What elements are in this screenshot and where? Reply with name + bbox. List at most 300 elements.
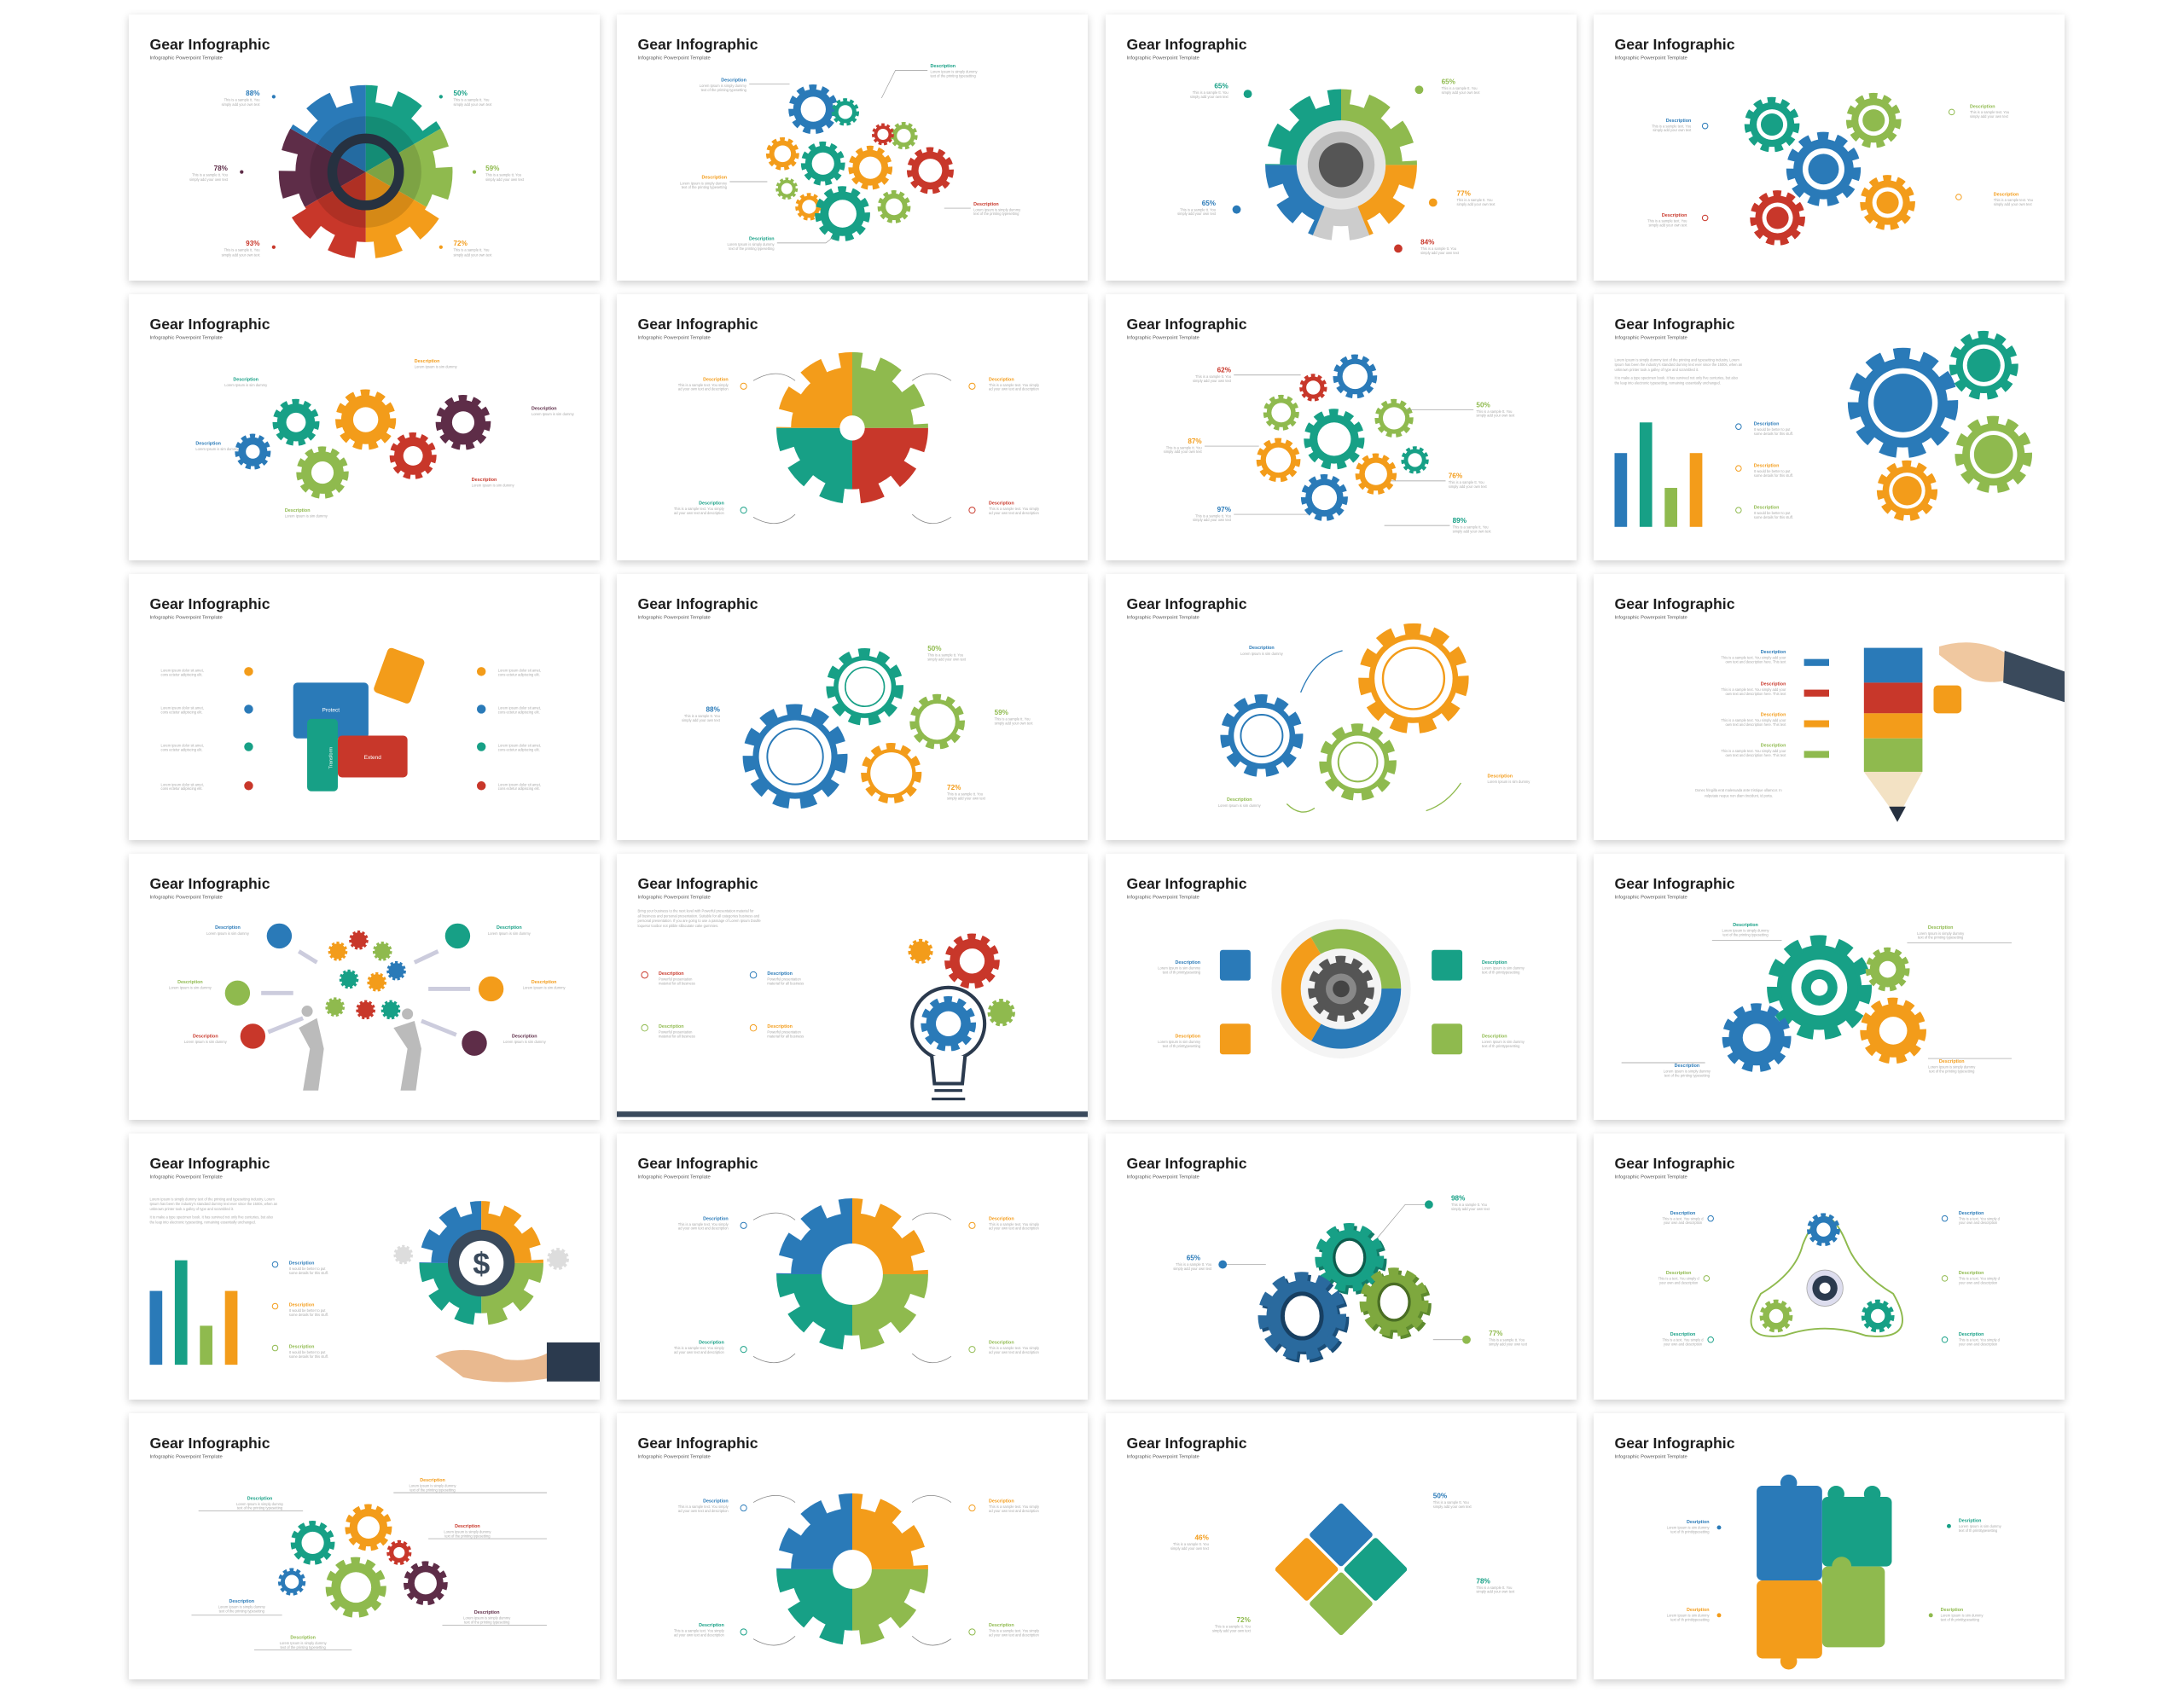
slide 8: bars and gears: Gear Infographic [1614, 316, 1735, 333]
labels: This is a sample tt. You [1433, 1500, 1469, 1505]
labels: text of th printitypesetting [1941, 1617, 1979, 1621]
descriptions: own text and description here. This text [1725, 722, 1786, 727]
labels: This is a sample tt. You [684, 714, 720, 718]
slide 11: three outline gears [1106, 574, 1577, 840]
labels: Desription [1687, 1608, 1710, 1613]
lists: cons ectetur adipiscing elit. [498, 786, 540, 791]
labels: 65% [1442, 78, 1456, 86]
labels: Description [195, 441, 221, 446]
slide 1: segmented gear: Infographic Powerpoint Template [149, 55, 223, 61]
labels: simply add your own text [1970, 114, 2009, 119]
labels [1658, 1211, 2000, 1346]
labels: 88% [246, 90, 260, 97]
descriptions [642, 971, 804, 1039]
slide 21: gear cluster with lines: Gear Infographic [149, 1435, 270, 1452]
gear [776, 1493, 928, 1644]
labels: Description [989, 1623, 1014, 1628]
labels: simply add your own text [1433, 1505, 1472, 1509]
labels: text of the printing typesetting [444, 1534, 490, 1538]
labels: 62% [1217, 366, 1232, 374]
labels: Lorem Ipsum is sim dummy [1218, 803, 1262, 808]
labels: This is a sample tt. You [1420, 246, 1456, 251]
gears [1263, 1227, 1426, 1357]
labels: Description [1666, 1271, 1691, 1276]
labels: simply add your own text [1190, 95, 1229, 99]
paragraph: It to make a type specimen book. It has survived not only five centuries, but also [1614, 376, 1739, 380]
labels: Lorem Ipsum is sim dummy [224, 383, 268, 387]
paragraph: unknown printer took a galley of type and scrambled it. [1614, 368, 1699, 372]
descriptions: Powerful presentation [659, 977, 692, 982]
descriptions: It would be better to put [289, 1267, 326, 1271]
labels: Lorem Ipsum is simply dummy [280, 1641, 328, 1645]
gears [1855, 335, 2027, 517]
slide 10: outline gears [617, 574, 1088, 840]
labels: Description [1959, 1332, 1984, 1337]
lists: Lorem ipsum dolor sit amet, [161, 744, 204, 748]
labels: ad your own text and description [989, 387, 1039, 391]
labels: Lorem Ipsum is sim dummy [1482, 1040, 1525, 1044]
labels: Description [1994, 192, 2018, 197]
labels [1218, 646, 1531, 808]
slide 11: three outline gears: Infographic Powerpoint Template [1126, 615, 1199, 620]
slide 8: bars and gears [1594, 294, 2065, 560]
descriptions: Description [1761, 682, 1786, 687]
labels: This is a sample tt. You [1476, 409, 1512, 414]
labels: Description [1662, 213, 1687, 218]
labels: 65% [1202, 200, 1217, 207]
labels: Description [455, 1524, 480, 1529]
labels: Description [1666, 119, 1691, 124]
labels [680, 64, 1021, 251]
descriptions: It would be better to put [289, 1308, 326, 1313]
gears [1226, 630, 1461, 796]
descriptions [1736, 422, 1793, 519]
bar chart [1614, 422, 1702, 527]
slide 9: puzzle [129, 574, 600, 840]
slide 1: segmented gear: Gear Infographic [149, 36, 270, 53]
labels: simply add your own text [1476, 1590, 1515, 1594]
labels: Description [1227, 797, 1252, 803]
labels: 65% [1214, 83, 1228, 90]
descriptions: Description [659, 971, 684, 977]
paragraph: It to make a type specimen book. It has survived not only five centuries, but also [149, 1215, 274, 1220]
labels: This is a sample tt. You [454, 97, 489, 101]
circles and labels: Description [193, 1035, 218, 1040]
slide 20: spinner gears: Gear Infographic [1614, 1155, 1735, 1172]
descriptions [1695, 650, 1829, 797]
paragraph: the leap into electronic typesetting, remaining essentially unchanged. [1614, 380, 1721, 385]
labels: This is a text. You simply d [1959, 1277, 2000, 1281]
labels: simply add your own text [1173, 1267, 1212, 1271]
descriptions: Description [1761, 713, 1786, 718]
dollar gear: $ [473, 1246, 490, 1281]
circles and labels: Lorem Ipsum is sim dummy [169, 985, 212, 989]
descriptions: some details for this stuff. [289, 1354, 328, 1359]
descriptions: Description [289, 1345, 314, 1350]
circles and labels: Lorem Ipsum is sim dummy [488, 931, 531, 936]
labels: Description [721, 78, 746, 83]
labels: simply add your own text [1177, 212, 1217, 216]
slide 15: ring gear with squares: Gear Infographic [1126, 875, 1247, 892]
slide 12: pencil puzzle: Gear Infographic [1614, 595, 1735, 612]
labels: This is a text. You simply d [1959, 1216, 2000, 1220]
slide 2: gear cluster [617, 14, 1088, 281]
slide 3: globe gear: Gear Infographic [1126, 36, 1247, 53]
labels: Description [285, 508, 310, 513]
spinner [1751, 1215, 1902, 1336]
labels: This is a sample text. You simply [678, 1222, 729, 1226]
labels: 93% [246, 240, 260, 247]
labels: ad your own text and description [678, 1509, 729, 1513]
labels: This is a sample text. You simply [989, 1222, 1040, 1226]
labels: simply add your own text [1420, 251, 1460, 255]
slide 22: solid quartered gear [617, 1413, 1088, 1679]
labels: This is a sample tt. You [1176, 1262, 1211, 1267]
labels: text of the printing typesetting [1929, 1069, 1974, 1073]
slide 18: ring gear four colors: Gear Infographic [637, 1155, 758, 1172]
labels: This is a sample tt. You [947, 792, 983, 797]
labels: Lorem Ipsum is sim dummy [1240, 652, 1284, 656]
descriptions: own text and description here. This text [1725, 692, 1786, 696]
slide 23: diamond puzzle: Gear Infographic [1126, 1435, 1247, 1452]
lists: cons ectetur adipiscing elit. [161, 747, 203, 751]
labels: Lorem Ipsum is sim dummy [531, 412, 575, 416]
labels: 50% [454, 90, 468, 97]
labels: simply add your own text [1193, 518, 1232, 522]
labels: This is a sample tt. You [1451, 1203, 1487, 1207]
labels: This is a sample tt. You [995, 717, 1031, 722]
labels: simply add your own text [222, 252, 260, 257]
labels: This is a sample text. You simply [674, 507, 725, 511]
labels: ad your own text and description [989, 1350, 1039, 1354]
labels: This is a sample tt. You [224, 248, 260, 252]
slide 21: gear cluster with lines [129, 1413, 600, 1679]
descriptions: It would be better to put [1754, 511, 1791, 515]
labels: simply add your own text [1170, 1546, 1210, 1551]
lists: Lorem ipsum dolor sit amet, [161, 782, 204, 786]
slide 23: diamond puzzle [1106, 1413, 1577, 1679]
labels: text of the printing typesetting [1918, 936, 1963, 940]
slide 5: scattered gears [129, 294, 600, 560]
labels: This is a sample text. You simply [989, 1505, 1040, 1509]
paragraph: Ipsum has been the industry's standard dummy text ever since the 1500s, when an [1614, 362, 1742, 367]
labels: ad your own text and description [674, 511, 724, 515]
lists: Lorem ipsum dolor sit amet, [498, 744, 541, 748]
labels: Lorem Ipsum is simply dummy [1928, 1065, 1976, 1070]
slide 18: ring gear four colors: Infographic Powerpoint Template [637, 1174, 711, 1180]
labels: This is a sample tt. You [1453, 525, 1489, 529]
labels: This is a sample text. You simply [989, 1628, 1040, 1632]
labels: This is a sample tt. You [1195, 374, 1231, 379]
labels: This is a sample text. You [1652, 124, 1691, 128]
slide 14: bulb gears: Gear Infographic [637, 875, 758, 892]
gear cluster [299, 931, 421, 1091]
labels: This is a sample tt. You [1195, 513, 1231, 518]
labels: Description [1175, 960, 1200, 965]
labels [674, 374, 1040, 524]
labels: simply add your own text [222, 102, 260, 107]
slide 21: gear cluster with lines: Infographic Powerpoint Template [149, 1454, 223, 1459]
slide 7: percent gear cluster [1106, 294, 1577, 560]
labels: Lorem Ipsum is sim dummy [1158, 966, 1201, 971]
labels: simply add your own text [189, 177, 229, 182]
labels: your own and description [1659, 1280, 1698, 1284]
labels: 89% [1453, 517, 1467, 525]
descriptions: This is a sample text. You simply add your [1721, 718, 1786, 722]
labels: 97% [1217, 506, 1232, 513]
slide 22: solid quartered gear: Infographic Powerpoint Template [637, 1454, 711, 1459]
labels: Description [989, 377, 1014, 382]
labels: Description [1928, 925, 1953, 931]
labels: Description [420, 1478, 445, 1483]
paragraph: Ipsum has been the industry's standard dummy text ever since the 1500s, when an [149, 1202, 277, 1206]
labels: 77% [1457, 189, 1472, 197]
circles and labels: Lorem Ipsum is sim dummy [503, 1040, 547, 1044]
labels: This is a sample tt. You [1215, 1625, 1251, 1629]
descriptions: own text and description here. This text [1725, 660, 1786, 664]
labels: 72% [454, 240, 468, 247]
arrows [1287, 651, 1461, 812]
labels: Lorem Ipsum is sim dummy [285, 513, 328, 518]
pencil [1864, 648, 1961, 822]
descriptions: material for all business [767, 982, 804, 986]
labels: Lorem Ipsum is sim dummy [1667, 1613, 1711, 1617]
labels: simply add your own text [1442, 90, 1480, 95]
labels: This is a sample tt. You [1193, 90, 1228, 95]
labels: Description [415, 359, 439, 364]
slide 17: dollar gear with bars: Infographic Powerpoint Template [149, 1174, 223, 1180]
descriptions: Description [1761, 650, 1786, 655]
lists: Lorem ipsum dolor sit amet, [161, 705, 204, 710]
slide 4: five gears: Infographic Powerpoint Template [1614, 55, 1687, 61]
slide 6: four-piece gear: Infographic Powerpoint Template [637, 335, 711, 340]
paragraph [1614, 357, 1742, 385]
lists [161, 667, 541, 791]
labels: ad your own text and description [989, 1632, 1039, 1637]
slide 24: four-piece puzzle [1594, 1413, 2065, 1679]
slide 4: five gears [1594, 14, 2065, 281]
labels: simply add your own text [1193, 379, 1232, 383]
labels: ad your own text and description [674, 1350, 724, 1354]
puzzle pieces: Transform [328, 746, 334, 769]
labels: text of the printing typesetting [729, 246, 775, 251]
labels: simply add your own text [1489, 1342, 1528, 1346]
slide 13: people and gears [129, 854, 600, 1120]
labels: Description [1670, 1211, 1695, 1216]
labels: simply add your own text [1449, 484, 1487, 489]
slide 4: five gears: Gear Infographic [1614, 36, 1735, 53]
labels [195, 359, 575, 518]
gears [1748, 96, 1912, 242]
labels: This is a sample tt. You [1457, 198, 1492, 202]
labels: simply add your own text [485, 177, 525, 182]
labels: Lorem Ipsum is simply dummy [680, 181, 728, 185]
descriptions: This is a sample text. You simply add your [1721, 656, 1786, 660]
labels: This is a sample tt. You [1476, 1586, 1512, 1590]
labels: text of the printing typesetting [1664, 1073, 1710, 1077]
labels: text of the printing typesetting [682, 185, 727, 189]
lists: cons ectetur adipiscing elit. [161, 672, 203, 676]
slide 9: puzzle: Gear Infographic [149, 595, 270, 612]
labels [674, 1495, 1040, 1645]
labels: Desription [1959, 1518, 1981, 1523]
ring [1271, 919, 1411, 1058]
lists: cons ectetur adipiscing elit. [498, 672, 540, 676]
slide 5: scattered gears: Infographic Powerpoint Template [149, 335, 223, 340]
labels: text of the printing typesetting [410, 1487, 456, 1492]
descriptions: some details for this stuff. [1754, 515, 1793, 519]
labels: This is a text. You simply d [1658, 1277, 1699, 1281]
labels [1164, 366, 1515, 533]
labels: Description [1959, 1271, 1984, 1276]
labels: Description [699, 1341, 724, 1346]
labels: This is a text. You simply d [1662, 1216, 1704, 1220]
lists: Lorem ipsum dolor sit amet, [498, 705, 541, 710]
labels: Lorem Ipsum is simply dummy [930, 70, 978, 74]
labels: ad your own text and description [674, 1632, 724, 1637]
slide 12: pencil puzzle [1594, 574, 2065, 840]
labels: simply add your own text [947, 797, 986, 801]
labels: 50% [927, 645, 942, 652]
labels: Description [1675, 1064, 1699, 1069]
labels: Description [1482, 1035, 1507, 1040]
labels: Description [1970, 104, 1995, 109]
labels: text of th printitypesetting [1959, 1528, 1997, 1533]
labels: Lorem Ipsum is simply dummy [1917, 931, 1965, 936]
labels: This is a sample text. You simply [678, 1505, 729, 1509]
labels: Description [474, 1610, 500, 1615]
labels: Lorem Ipsum is simply dummy [1664, 1069, 1711, 1073]
labels: simply add your own text [454, 102, 492, 107]
circles and labels: Description [497, 925, 522, 931]
descriptions: Description [289, 1303, 314, 1308]
labels: This is a sample text. You [1647, 218, 1687, 223]
descriptions: It would be better to put [1754, 469, 1791, 473]
paragraph [149, 1197, 277, 1224]
labels: text of the printing typesetting [219, 1609, 264, 1614]
labels: Description [699, 1623, 724, 1628]
slide 11: three outline gears: Gear Infographic [1126, 595, 1247, 612]
labels: text of the printing typesetting [464, 1621, 509, 1625]
labels: simply add your own text [1453, 529, 1491, 533]
labels: your own and description [1664, 1220, 1702, 1225]
labels: This is a sample tt. You [454, 248, 489, 252]
labels: This is a sample text. You simply [989, 507, 1040, 511]
slide 19: 3D gears: Infographic Powerpoint Template [1126, 1174, 1199, 1180]
labels: text of the printing typesetting [281, 1645, 326, 1650]
labels: text of th printitypesetting [1670, 1617, 1710, 1621]
gears [768, 88, 950, 238]
labels: Description [1670, 1332, 1695, 1337]
labels: 87% [1188, 438, 1202, 445]
descriptions: This is a sample text. You simply add your [1721, 749, 1786, 753]
labels: Description [233, 377, 258, 382]
circles and labels: Description [215, 925, 241, 931]
labels: Description [699, 502, 724, 507]
slide 23: diamond puzzle: Infographic Powerpoint Template [1126, 1454, 1199, 1459]
labels: 98% [1451, 1194, 1466, 1202]
labels: your own and description [1664, 1342, 1702, 1346]
labels: simply add your own text [1653, 128, 1692, 132]
descriptions: Description [289, 1261, 314, 1267]
labels: your own and description [1959, 1280, 1997, 1284]
descriptions: This is a sample text. You simply add your [1721, 687, 1786, 692]
labels: ad your own text and description [989, 1509, 1039, 1513]
descriptions: material for all business [659, 1035, 695, 1039]
dollar gear [394, 1201, 569, 1325]
labels: Lorem Ipsum is sim dummy [472, 483, 515, 487]
labels: Lorem Ipsum is simply dummy [409, 1484, 457, 1488]
slide 10: outline gears: Gear Infographic [637, 595, 758, 612]
puzzle pieces: Extend [364, 755, 381, 761]
labels: Lorem Ipsum is simply dummy [444, 1529, 491, 1534]
paragraph: Lorem Ipsum is simply dummy text of the printing and typesetting industry. Lorem [149, 1197, 275, 1201]
slide 20: spinner gears [1594, 1133, 2065, 1400]
labels: This is a sample tt. You [1180, 207, 1216, 212]
circles and labels: Lorem Ipsum is sim dummy [206, 931, 250, 936]
labels: This is a sample text. You simply [674, 1346, 725, 1350]
labels: your own and description [1959, 1220, 1997, 1225]
labels: Lorem Ipsum is simply dummy [1722, 928, 1770, 932]
bottom bar [617, 1111, 1088, 1117]
slide 16: four gears [1594, 854, 2065, 1120]
labels: Lorem Ipsum is simply dummy [218, 1605, 266, 1609]
slide 2: gear cluster: Infographic Powerpoint Template [637, 55, 711, 61]
descriptions: Powerful presentation [659, 1030, 692, 1035]
slide 13: people and gears: Infographic Powerpoint Template [149, 895, 223, 900]
gear [1265, 89, 1417, 241]
labels [1158, 960, 1525, 1048]
descriptions [272, 1261, 328, 1359]
slide 8: bars and gears: Infographic Powerpoint Template [1614, 335, 1687, 340]
labels: Description [1487, 774, 1513, 779]
labels: ad your own text and description [678, 387, 729, 391]
labels: Lorem Ipsum is sim dummy [1959, 1524, 2002, 1528]
gears [280, 1507, 444, 1614]
circles and labels: Description [531, 980, 556, 985]
puzzle diamond [1274, 1502, 1409, 1636]
labels: ad your own text and description [678, 1226, 729, 1231]
labels: simply add your own text [995, 721, 1033, 725]
descriptions: own text and description here. This text [1725, 753, 1786, 757]
labels: Lorem Ipsum is sim dummy [415, 365, 458, 369]
labels: Lorem Ipsum is sim dummy [195, 447, 239, 451]
labels: Description [229, 1599, 254, 1604]
labels: your own and description [1959, 1342, 1997, 1346]
labels: Lorem Ipsum is sim dummy [1487, 780, 1531, 784]
slide 19: 3D gears [1106, 1133, 1577, 1400]
circles and labels: Description [177, 980, 203, 985]
labels: 46% [1195, 1534, 1210, 1542]
gear [776, 351, 928, 503]
gears [750, 653, 961, 802]
slide 24: four-piece puzzle: Gear Infographic [1614, 1435, 1735, 1452]
labels: simply add your own text [1476, 414, 1515, 418]
labels: simply add your own text [1649, 223, 1687, 227]
labels: Description [290, 1636, 316, 1641]
lists: cons ectetur adipiscing elit. [161, 710, 203, 714]
hand [1939, 642, 2065, 702]
labels: Description [703, 1216, 729, 1221]
slide 24: four-piece puzzle: Infographic Powerpoint Template [1614, 1454, 1687, 1459]
labels: Lorem Ipsum is simply dummy [727, 242, 775, 246]
slide 17: dollar gear with bars: Gear Infographic [149, 1155, 270, 1172]
labels: Desription [1687, 1520, 1710, 1525]
circles and labels: Description [512, 1035, 537, 1040]
labels: Lorem Ipsum is sim dummy [1482, 966, 1525, 971]
labels: This is a sample tt. You [1449, 480, 1484, 484]
descriptions: Description [1754, 464, 1779, 469]
